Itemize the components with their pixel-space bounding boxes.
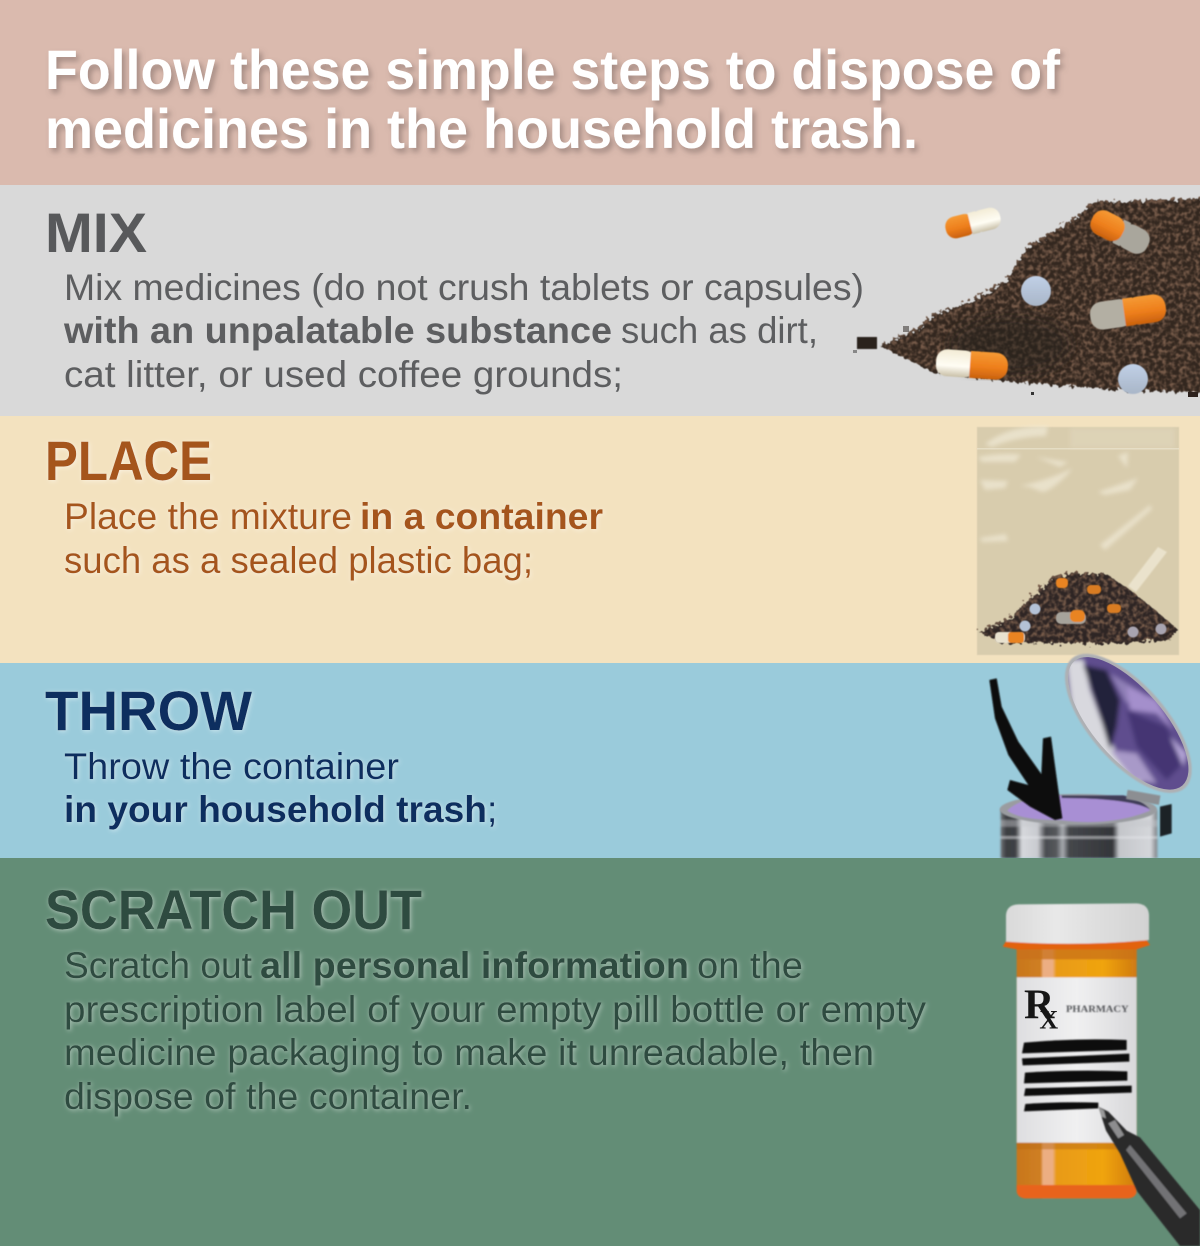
text block: scratch out instructions: Scratch out (64, 945, 253, 986)
heading: scratch out: SCRATCH OUT (45, 878, 422, 941)
text block: scratch out instructions: prescription label of your empty pill bottle or empty (64, 989, 927, 1030)
tablet: upper (1021, 276, 1051, 306)
bottle flange (1003, 940, 1150, 949)
text block: mix instructions: cat litter, or used coffee grounds; (64, 354, 623, 395)
title: medicines in the household trash. (45, 97, 918, 160)
text block: place instructions: such as a sealed plastic bag; (64, 540, 533, 581)
bottle body (1003, 903, 1150, 1198)
label: Rx mark: R (1024, 982, 1055, 1028)
panel: throw (0, 633, 1200, 858)
panel: place (0, 416, 1200, 663)
text block: throw instructions: Throw the container (64, 746, 399, 787)
lid hinge arm (1126, 790, 1160, 805)
heading: place: PLACE (45, 429, 212, 492)
can rim and liner (1000, 794, 1157, 825)
text block: mix instructions: with an unpalatable substance (63, 310, 612, 351)
pill: lower white capsule (935, 349, 1009, 380)
pill: half-buried top capsule (1086, 206, 1154, 258)
marker pen (1098, 1107, 1200, 1246)
text block: scratch out instructions: on the (697, 945, 803, 986)
text block: mix instructions: Mix medicines (do not crush tablets or capsules) (64, 267, 864, 308)
text block: place instructions (64, 496, 603, 581)
tablet: lower (1118, 364, 1148, 394)
text block: throw instructions: ; (487, 789, 497, 830)
title (45, 38, 1060, 160)
text block: throw instructions (64, 746, 497, 830)
label: pharmacy text: PHARMACY (1066, 1004, 1129, 1014)
arrow (989, 678, 1062, 820)
panel: mix (0, 185, 1200, 416)
text block: scratch out instructions: medicine packaging to make it unreadable, then (64, 1032, 874, 1073)
text block: scratch out instructions: dispose of the container. (64, 1076, 472, 1117)
illustration: sealed plastic bag (977, 426, 1179, 655)
text block: scratch out instructions: all personal information (260, 945, 689, 986)
label: Rx mark: X (1039, 1005, 1058, 1034)
text block: mix instructions (63, 267, 864, 395)
panel: header (0, 0, 1200, 185)
text block: place instructions: Place the mixture (64, 496, 352, 537)
illustration: trash can (989, 633, 1200, 858)
text block: throw instructions: in your household trash (64, 789, 487, 830)
illustration: soil pile with pills (853, 198, 1200, 397)
lid (1064, 653, 1192, 794)
panel: scratch out (0, 858, 1200, 1246)
text block: scratch out instructions (64, 945, 927, 1117)
heading: throw: THROW (45, 679, 252, 742)
pill: loose orange capsule (943, 206, 1003, 240)
illustration: pill bottle (1003, 903, 1200, 1246)
title: Follow these simple steps to dispose of (45, 38, 1060, 101)
text block: place instructions: in a container (360, 496, 603, 537)
hinge (1160, 804, 1172, 837)
scratched out lines (1022, 1039, 1132, 1111)
pill: speckled capsule (1088, 293, 1168, 331)
text block: mix instructions: such as dirt, (621, 310, 818, 351)
heading: mix: MIX (45, 201, 147, 264)
prescription label (1017, 977, 1137, 1143)
bottle cap (1006, 903, 1149, 944)
can body (1001, 810, 1157, 858)
